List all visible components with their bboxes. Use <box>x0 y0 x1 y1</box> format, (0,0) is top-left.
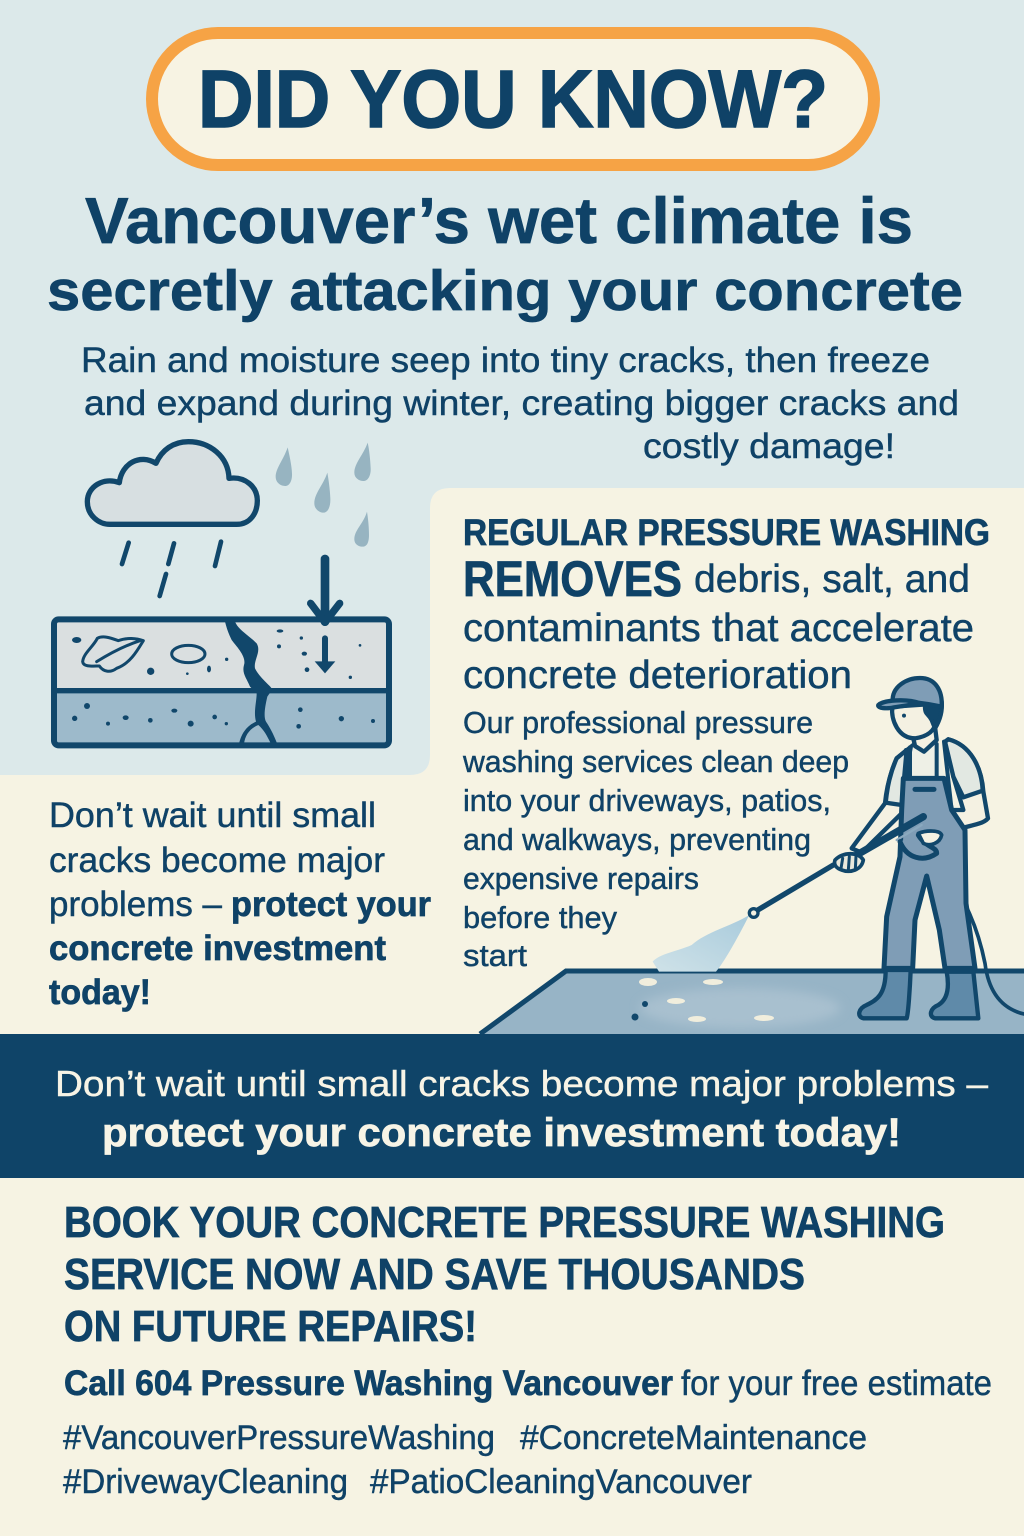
icon: water drops <box>276 443 371 547</box>
contact line <box>64 1364 992 1403</box>
left call to action text: today! <box>49 973 151 1012</box>
arrow: small downward <box>315 638 335 673</box>
headline: Vancouver’s wet climate is <box>85 184 913 257</box>
intro paragraph: and expand during winter, creating bigger cracks and <box>84 384 959 423</box>
icon: hands <box>835 831 942 871</box>
icon: shirt and arms <box>852 739 988 853</box>
booking heading <box>64 1198 945 1351</box>
banner: navy call to action <box>0 1034 1024 1178</box>
service description <box>462 705 849 973</box>
service description: before they <box>463 900 617 935</box>
icon: concrete slab layers <box>54 619 389 745</box>
service description: washing services clean deep <box>462 744 849 779</box>
left call to action text: cracks become major <box>49 841 385 880</box>
icon: grit specks <box>72 629 375 729</box>
panel: pressure washing benefit text <box>462 512 990 973</box>
hashtags: #ConcreteMaintenance <box>520 1419 867 1457</box>
intro paragraph <box>81 341 959 466</box>
key statement: contaminants that accelerate <box>463 607 974 650</box>
left call to action text: protect your <box>231 885 431 924</box>
icon: pressure gun and wand <box>749 817 937 917</box>
booking heading: ON FUTURE REPAIRS! <box>64 1302 477 1351</box>
hashtags: #VancouverPressureWashing <box>63 1419 495 1457</box>
icon: overalls <box>884 742 975 968</box>
headline <box>47 184 963 323</box>
intro paragraph: costly damage! <box>643 427 895 466</box>
left call to action text <box>49 796 431 1012</box>
banner: navy call to action: protect your concrete investment today! <box>102 1111 901 1155</box>
key statement: REMOVES <box>463 551 682 607</box>
icon: rain streaks <box>122 542 221 596</box>
hashtags: #DrivewayCleaning <box>63 1463 348 1501</box>
service description: start <box>463 938 527 973</box>
left call to action text: concrete investment <box>49 929 386 968</box>
key statement: concrete deterioration <box>463 654 852 697</box>
illustration: rain seeping into cracked concrete <box>54 442 389 745</box>
title badge: DID YOU KNOW? <box>198 54 828 145</box>
icon: head and cap <box>878 678 942 752</box>
service description: into your driveways, patios, <box>463 783 831 818</box>
icon: leaf debris <box>83 637 205 671</box>
headline: secretly attacking your concrete <box>47 259 963 323</box>
key statement: debris, salt, and <box>694 558 970 601</box>
intro paragraph: Rain and moisture seep into tiny cracks, then freeze <box>81 341 930 380</box>
icon: boots <box>859 970 978 1018</box>
icon: hose <box>937 857 1024 1014</box>
service description: Our professional pressure <box>463 705 813 740</box>
left call to action text: problems – <box>49 885 223 924</box>
hashtags: #PatioCleaningVancouver <box>370 1463 752 1501</box>
contact line: for your free estimate <box>681 1364 992 1403</box>
left call to action text: Don’t wait until small <box>49 796 376 835</box>
service description: and walkways, preventing <box>463 822 811 857</box>
arrow: large downward <box>311 559 340 622</box>
panel: cream content background <box>0 488 1024 1536</box>
icon: water spray <box>653 915 749 972</box>
icon: cloud <box>87 442 257 524</box>
title badge <box>152 33 874 165</box>
illustration: worker with pressure washer <box>653 678 1024 1018</box>
key statement <box>463 551 974 697</box>
service description: expensive repairs <box>463 861 699 896</box>
illustration: wet driveway surface <box>480 971 1024 1036</box>
booking heading: SERVICE NOW AND SAVE THOUSANDS <box>64 1250 805 1299</box>
hashtags <box>63 1419 867 1501</box>
contact line: Call 604 Pressure Washing Vancouver <box>64 1364 673 1403</box>
banner: navy call to action: Don’t wait until small cracks become major problems – <box>55 1063 988 1104</box>
